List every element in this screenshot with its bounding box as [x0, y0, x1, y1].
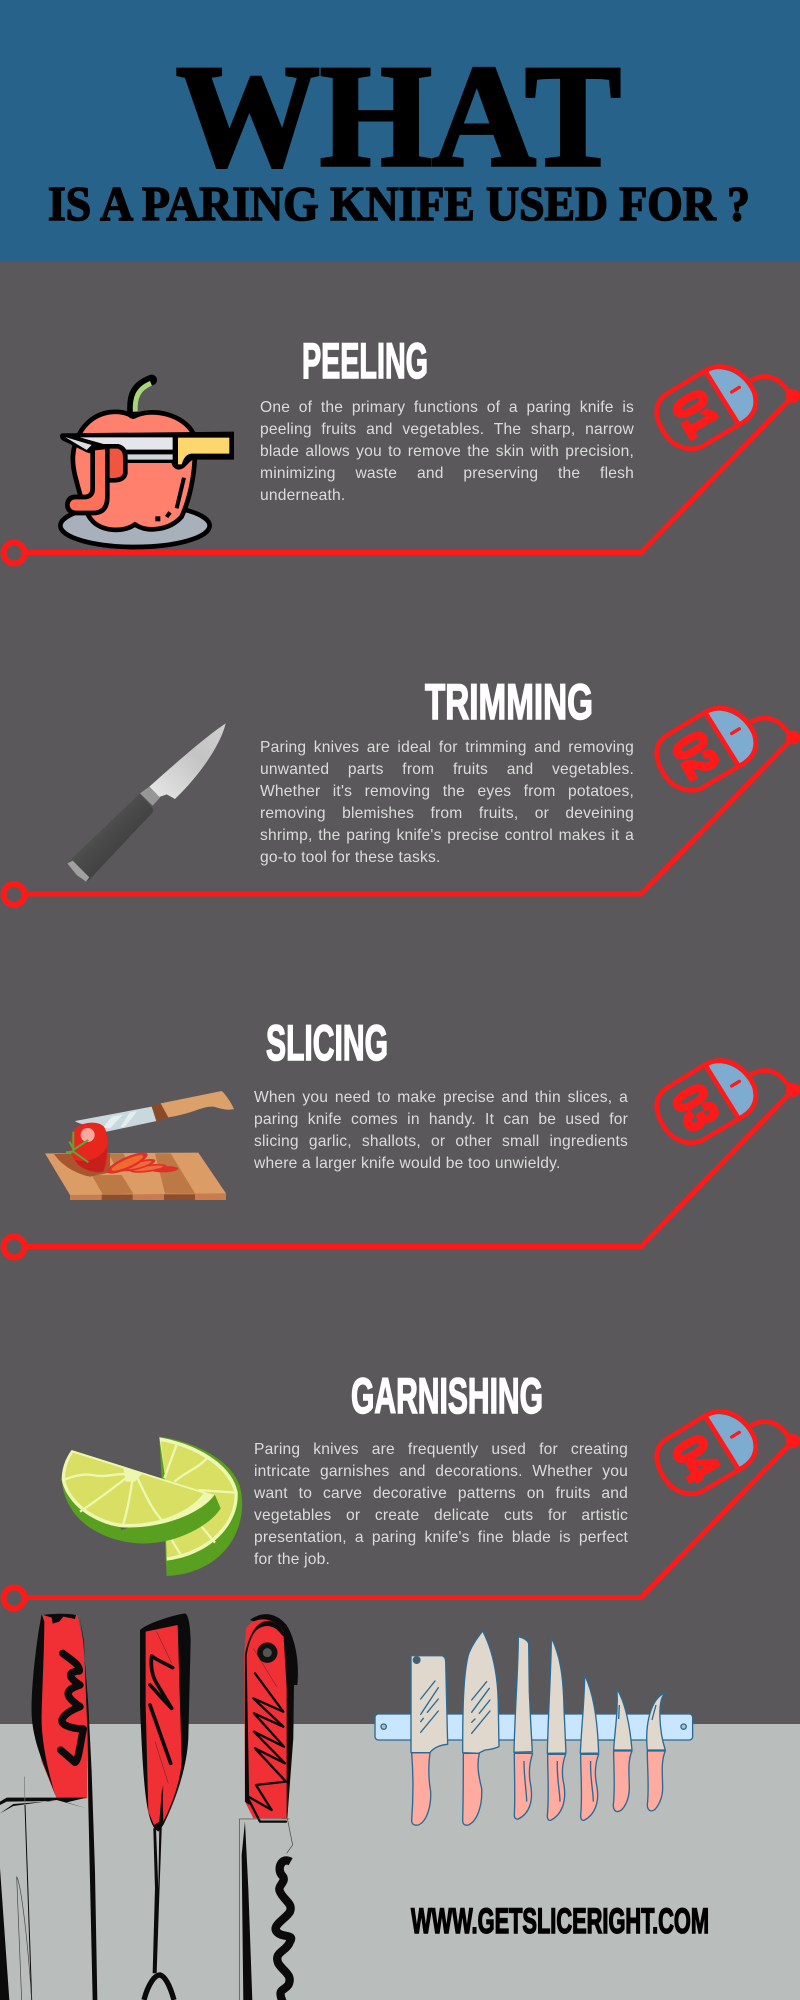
footer background band — [0, 1724, 800, 2000]
text: garnishing: presentation, a paring knife's fine blade is perfect — [254, 1529, 628, 1546]
header banner — [0, 0, 800, 262]
text: garnishing: for the job. — [254, 1551, 330, 1568]
text: trimming: Whether it's removing the eyes from potatoes, — [260, 783, 634, 800]
timeline line 04 — [4, 1434, 800, 1608]
text: slicing: When you need to make precise and thin slices, a — [254, 1089, 628, 1106]
text: garnishing: vegetables or create delicate cuts for artistic — [254, 1507, 628, 1524]
text: trimming: go-to tool for these tasks. — [260, 849, 440, 866]
text: peeling: One of the primary functions of a paring knife is — [260, 399, 634, 416]
icon: knife slicing tomato on board — [45, 1091, 234, 1200]
text: slicing: paring knife comes in handy. It can be used for — [254, 1111, 628, 1128]
number badge 01 — [657, 367, 788, 449]
text: peeling: minimizing waste and preserving the flesh — [260, 465, 634, 482]
text: slicing — [254, 1089, 628, 1172]
text: slicing: slicing garlic, shallots, or other small ingredients — [254, 1133, 628, 1150]
icon: paring knife — [67, 723, 226, 882]
text: trimming: Paring knives are ideal for trimming and removing — [260, 739, 634, 756]
title: WHAT: WHAT — [176, 35, 621, 197]
text: peeling: underneath. — [260, 487, 345, 504]
panel: trimming — [0, 674, 800, 908]
icon: peeled pepper with knife — [60, 380, 234, 547]
panel: footer — [0, 1613, 800, 2000]
text: garnishing: Paring knives are frequently used for creating — [254, 1441, 628, 1458]
icon: lime wedges — [62, 1437, 242, 1576]
illustration: magnetic knife rack — [375, 1631, 693, 1825]
heading: slicing: SLICING — [266, 1015, 388, 1071]
heading: peeling: PEELING — [302, 333, 428, 389]
curved knife — [647, 1751, 665, 1811]
text: peeling: peeling fruits and vegetables. The sharp, narrow — [260, 421, 634, 438]
cleaver — [412, 1753, 431, 1825]
timeline line 03 — [4, 1083, 800, 1258]
paring knife — [613, 1751, 632, 1812]
text: trimming: unwanted parts from fruits and vegetables. — [260, 761, 634, 778]
text: peeling: blade allows you to remove the skin with precision, — [260, 443, 634, 460]
text: trimming: removing blemishes from fruits, or deveining — [260, 805, 634, 822]
heading: garnishing: GARNISHING — [351, 1368, 543, 1424]
text: peeling — [260, 399, 634, 504]
text: garnishing — [254, 1441, 628, 1568]
number badge 01: 01 — [661, 382, 729, 446]
panel: garnishing — [0, 1368, 800, 1612]
panel: slicing — [0, 1015, 800, 1260]
rack bar — [375, 1714, 693, 1740]
text: trimming: shrimp, the paring knife's precise control makes it a — [260, 827, 634, 844]
bread knife — [514, 1753, 533, 1819]
slicing knife — [547, 1754, 566, 1820]
number badge 03: 03 — [661, 1076, 729, 1140]
illustration: sketched red knives — [0, 1613, 298, 2000]
heading: trimming: TRIMMING — [425, 674, 593, 730]
utility knife — [581, 1754, 599, 1820]
number badge 03 — [657, 1061, 788, 1143]
panel: peeling — [0, 333, 800, 566]
timeline line 01 — [4, 389, 800, 564]
chef knife — [463, 1753, 482, 1825]
text: trimming — [260, 739, 634, 866]
number badge 02 — [657, 708, 788, 790]
number badge 02: 02 — [661, 723, 729, 787]
text: garnishing: want to carve decorative patterns on fruits and — [254, 1485, 628, 1502]
number badge 04 — [657, 1412, 788, 1494]
number badge 04: 04 — [661, 1427, 729, 1491]
text: garnishing: intricate garnishes and decorations. Whether you — [254, 1463, 628, 1480]
subtitle: IS A PARING KNIFE USED FOR ? — [48, 176, 750, 231]
timeline line 02 — [4, 730, 800, 905]
text: slicing: where a larger knife would be too unwieldy. — [254, 1155, 560, 1172]
